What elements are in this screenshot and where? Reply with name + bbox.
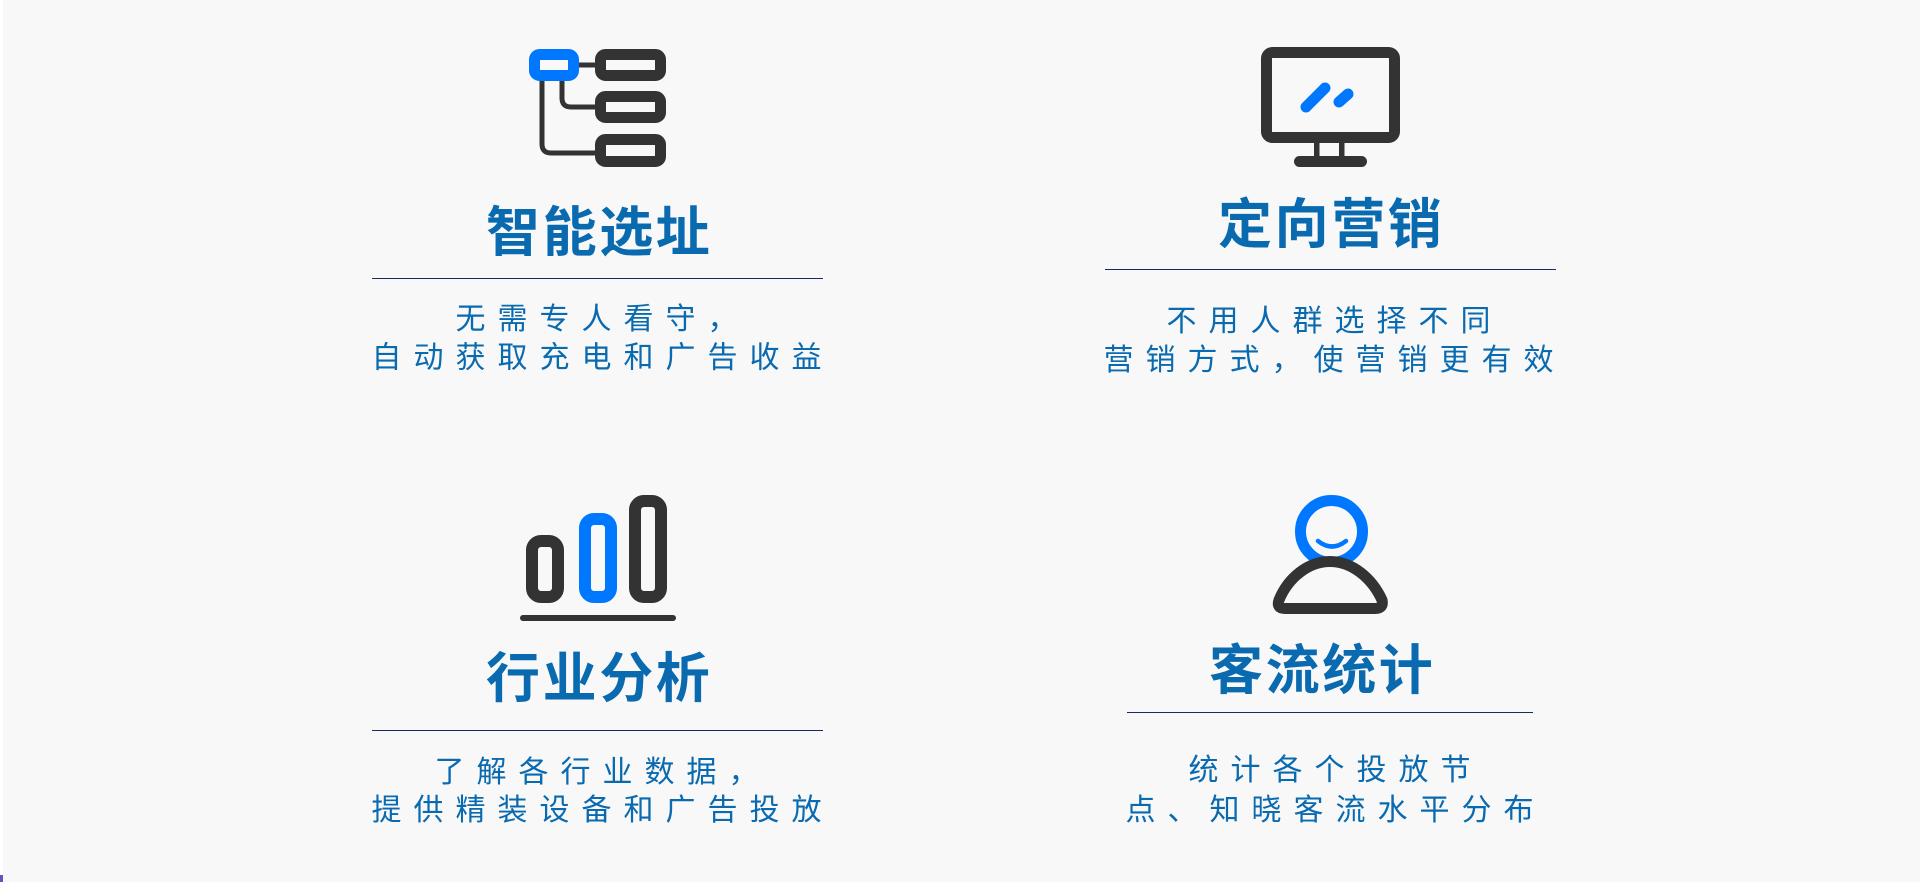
description bbox=[1126, 754, 1546, 827]
description: 营销方式，使营销更有效 bbox=[1104, 344, 1566, 377]
icon: monitor bbox=[1266, 52, 1394, 167]
heading: 定向营销 bbox=[1218, 195, 1444, 255]
panel: 行业分析 bbox=[372, 501, 834, 827]
heading: 行业分析 bbox=[486, 649, 712, 709]
description: 提供精装设备和广告投放 bbox=[372, 794, 834, 827]
description: 自动获取充电和广告收益 bbox=[372, 342, 834, 374]
description bbox=[1104, 305, 1566, 377]
description: 不用人群选择不同 bbox=[1166, 305, 1502, 338]
heading: 客流统计 bbox=[1209, 641, 1435, 701]
icon: person bbox=[1278, 500, 1382, 608]
panel: 定向营销 bbox=[1104, 52, 1566, 377]
description: 统计各个投放节 bbox=[1188, 754, 1482, 787]
icon: bar chart bbox=[520, 501, 676, 621]
description bbox=[372, 303, 834, 374]
description: 无需专人看守， bbox=[456, 303, 750, 336]
panel: 智能选址 bbox=[372, 54, 834, 374]
panel: 客流统计 bbox=[1126, 500, 1546, 827]
description: 了解各行业数据， bbox=[434, 756, 770, 789]
description: 点、知晓客流水平分布 bbox=[1126, 794, 1546, 827]
heading: 智能选址 bbox=[486, 203, 712, 263]
icon: site selection tree bbox=[534, 54, 660, 162]
description bbox=[372, 756, 834, 827]
